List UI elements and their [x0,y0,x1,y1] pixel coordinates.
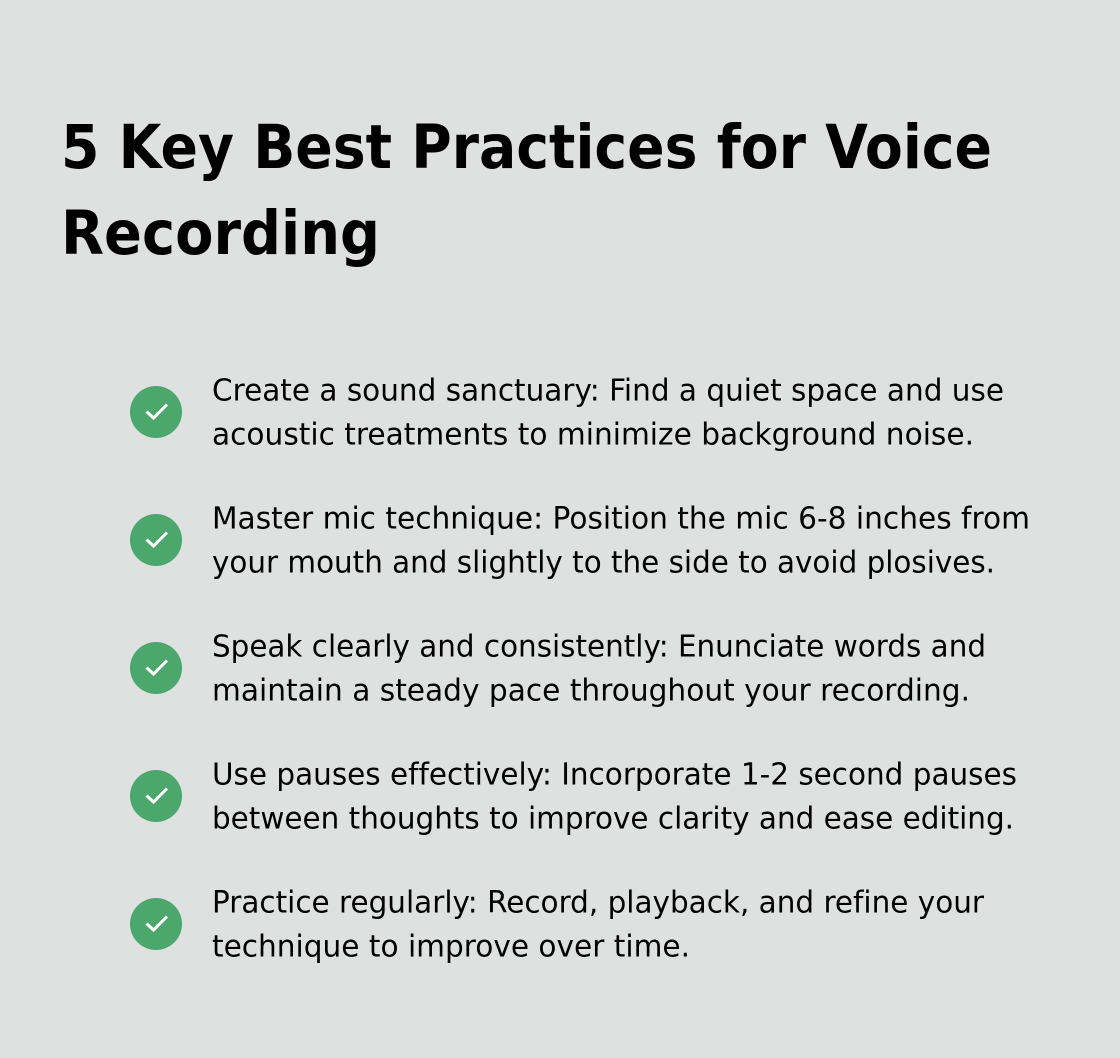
text 4: Use pauses effectively: Incorporate 1-2 second pauses [212,758,1017,792]
item 1 [130,374,1004,452]
text 1 [212,374,1004,452]
item 3 [130,630,986,708]
icon: check 3 [130,642,182,694]
text 5: Practice regularly: Record, playback, and refine your [212,886,985,920]
text 3: Speak clearly and consistently: Enunciate words and [212,630,986,664]
icon: check 5 [130,898,182,950]
text 2: Master mic technique: Position the mic 6-8 inches from [212,502,1030,536]
icon: check 2 [130,514,182,566]
text 3 [212,630,986,708]
text 1: acoustic treatments to minimize background noise. [212,418,974,452]
item 5 [130,886,985,964]
item 4 [130,758,1017,836]
icon: check 4 [130,770,182,822]
text 4 [212,758,1017,836]
checklist [130,374,1030,964]
text 3: maintain a steady pace throughout your recording. [212,674,970,708]
text 1: Create a sound sanctuary: Find a quiet space and use [212,374,1004,408]
text 5: technique to improve over time. [212,930,690,964]
item 2 [130,502,1030,580]
title: 5 Key Best Practices for Voice [61,112,992,183]
text 5 [212,886,985,964]
text 2: your mouth and slightly to the side to avoid plosives. [212,546,995,580]
title [61,112,992,269]
text 4: between thoughts to improve clarity and ease editing. [212,802,1014,836]
title: Recording [61,198,380,269]
icon: check 1 [130,386,182,438]
text 2 [212,502,1030,580]
